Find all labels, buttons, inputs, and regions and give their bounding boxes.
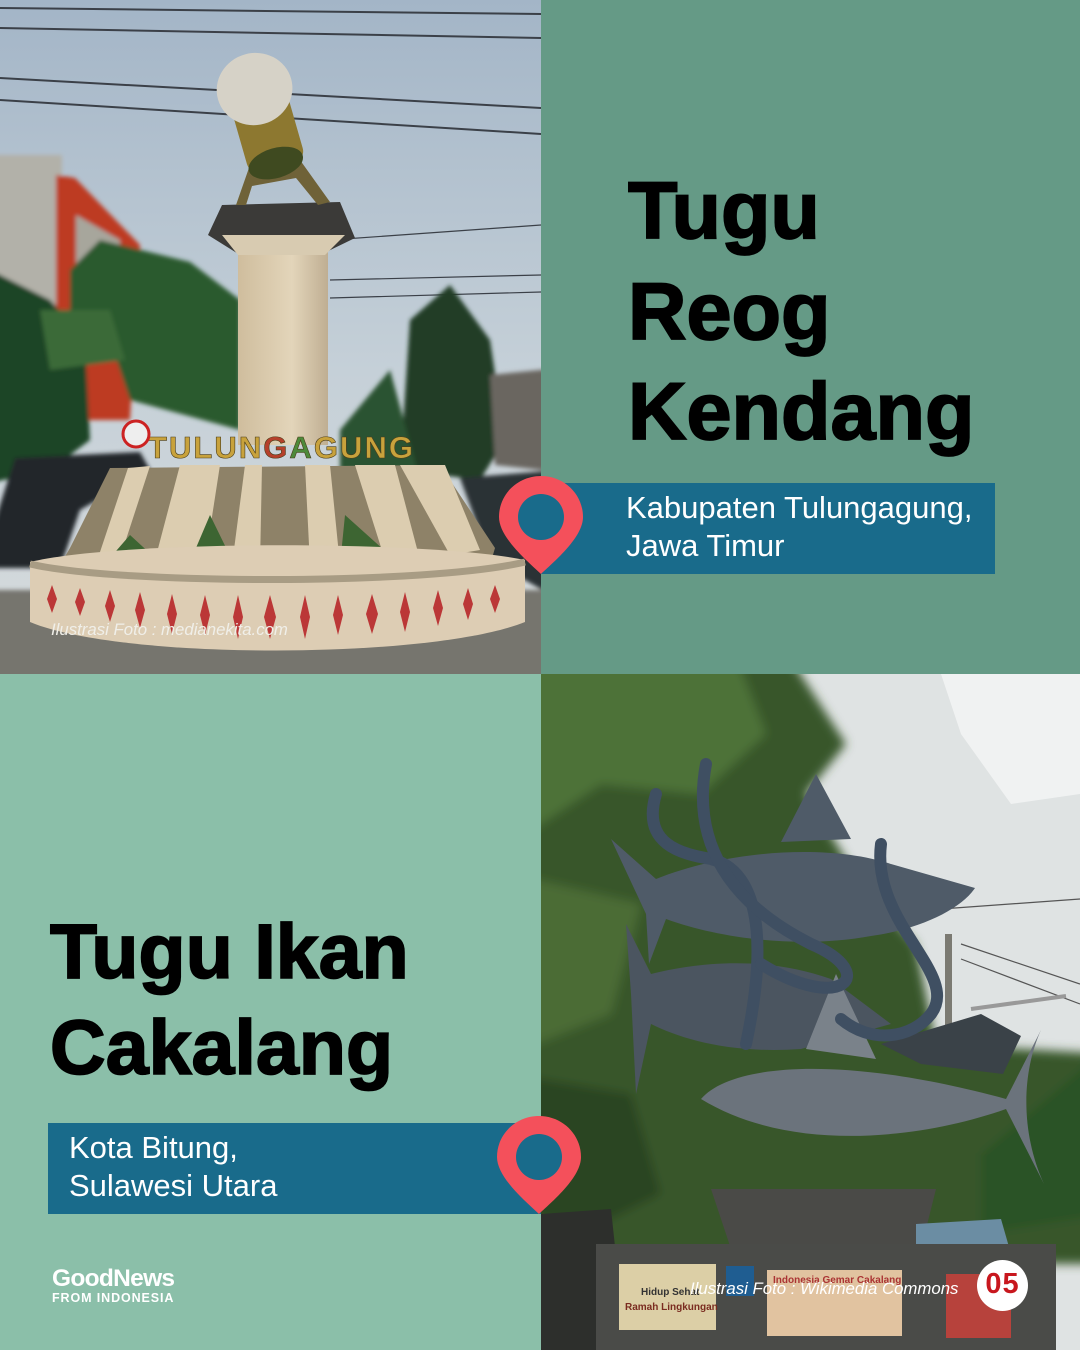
drum <box>236 160 330 205</box>
logo: GoodNews from Indonesia: FROM INDONESIA <box>52 1291 174 1305</box>
cars <box>0 452 150 568</box>
location bar: Tulungagung <box>541 483 995 574</box>
icon: map pin top <box>499 476 583 574</box>
title: Tugu Reog Kendang: Kendang <box>628 367 975 457</box>
location bar: Tulungagung: Jawa Timur <box>626 528 784 563</box>
panel: photo of Tugu Ikan Cakalang <box>541 674 1080 1350</box>
location bar: Bitung <box>48 1123 541 1214</box>
panel: photo of Tugu Ikan Cakalang: Indonesia Gemar Cakalang <box>773 1275 901 1286</box>
icon: map pin bottom <box>497 1116 581 1214</box>
title: Tugu Reog Kendang: Reog <box>628 266 830 356</box>
title: Tugu Ikan Cakalang: Cakalang <box>50 1005 393 1091</box>
page number badge: 05 <box>985 1268 1020 1300</box>
photo credit: bottom: Ilustrasi Foto : Wikimedia Commons <box>690 1279 958 1298</box>
base ring <box>30 545 525 650</box>
photo credit: top: Ilustrasi Foto : medianekita.com <box>51 620 288 639</box>
panel: photo of Tugu Ikan Cakalang: Ramah Lingkungan <box>625 1302 718 1313</box>
ground <box>0 590 560 700</box>
location bar: Bitung: Sulawesi Utara <box>69 1168 277 1203</box>
building <box>0 155 62 445</box>
logo: GoodNews from Indonesia: GoodNews <box>52 1265 174 1292</box>
letters: TULUNGAGUNG <box>148 430 413 465</box>
trees <box>70 240 240 430</box>
location bar: Tulungagung: Kabupaten Tulungagung, <box>626 490 972 525</box>
title: Tugu Ikan Cakalang: Tugu Ikan <box>50 909 409 995</box>
page number badge <box>977 1260 1028 1311</box>
panel: photo of Tugu Ikan Cakalang: Hidup Sehat <box>641 1287 700 1298</box>
logo: GoodNews from Indonesia <box>52 1265 174 1305</box>
title: Tugu Reog Kendang <box>628 166 975 457</box>
panel: top right green background <box>541 0 1080 674</box>
title: Tugu Reog Kendang: Tugu <box>628 166 820 256</box>
panel: photo of Tugu Reog Kendang <box>0 0 541 674</box>
fish sculptures <box>611 774 1044 1184</box>
location bar: Bitung: Kota Bitung, <box>69 1130 238 1165</box>
wedge base <box>60 465 495 565</box>
plinth <box>711 1189 936 1249</box>
monument column <box>238 245 328 445</box>
title: Tugu Ikan Cakalang <box>50 909 409 1092</box>
